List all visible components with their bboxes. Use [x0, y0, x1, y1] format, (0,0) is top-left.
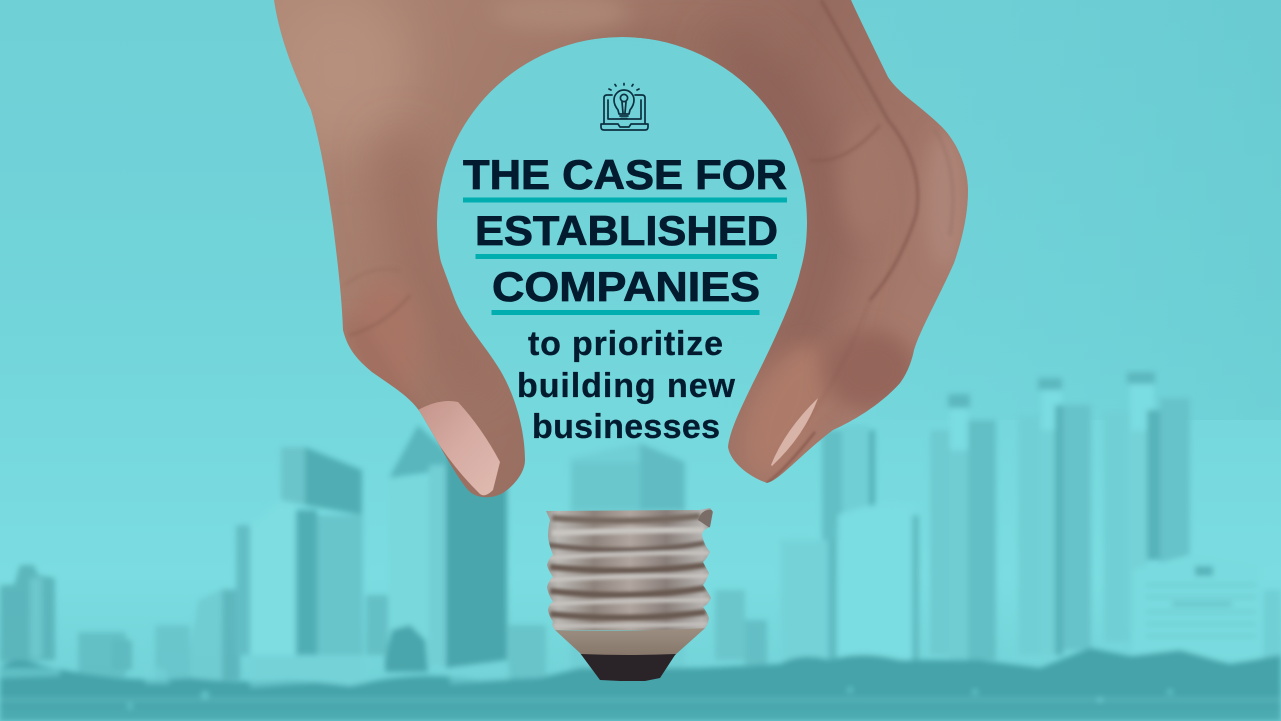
glass tower with triangular top — [366, 425, 507, 672]
title line 2: ESTABLISHED — [475, 207, 778, 254]
tree line — [0, 648, 1281, 721]
title line 2 underline — [476, 254, 777, 259]
left tower cluster — [0, 565, 55, 662]
central tower behind socket — [508, 443, 767, 680]
hand forming a light bulb outline — [260, 0, 980, 510]
background: blurred city skyline — [0, 372, 1281, 721]
title: the case for established companies — [463, 151, 787, 315]
title line 3 underline — [492, 310, 760, 315]
title line 1: THE CASE FOR — [463, 151, 787, 198]
thumbnail — [418, 401, 500, 495]
title line 3: COMPANIES — [492, 263, 760, 310]
subtitle line 2: building new — [517, 367, 736, 405]
lamp screw socket — [540, 505, 720, 681]
right towers — [780, 425, 919, 660]
title line 1 underline — [463, 198, 787, 202]
metal thread bands — [548, 516, 710, 626]
hand shading — [270, 0, 965, 487]
subtitle — [517, 325, 736, 446]
low wide building — [1133, 552, 1281, 660]
socket dark base contact — [580, 654, 676, 681]
fingertip nail sliver — [771, 398, 818, 466]
subtitle line 3: businesses — [532, 408, 720, 446]
finger separation and creases — [345, 0, 953, 483]
subtitle line 1: to prioritize — [528, 325, 723, 363]
icon: laptop with light bulb — [601, 84, 648, 130]
tall office tower — [236, 447, 366, 690]
low buildings left — [78, 588, 240, 680]
